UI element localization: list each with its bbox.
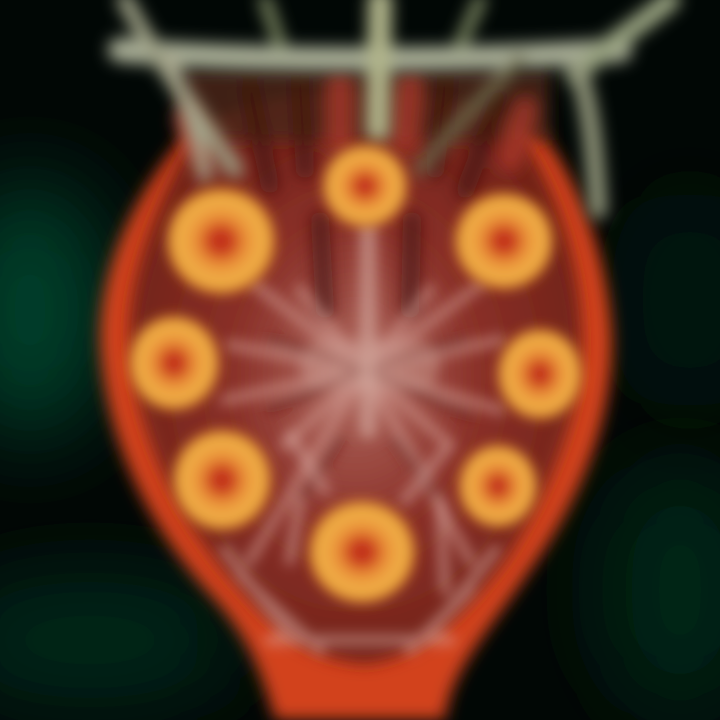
donut: top centre bbox=[323, 145, 407, 227]
donut: middle right bbox=[498, 329, 582, 419]
radial pale spokes bbox=[225, 230, 500, 650]
donut: bottom centre bbox=[309, 501, 415, 603]
top net strands bbox=[120, 0, 670, 210]
donut: lower left bbox=[173, 430, 271, 530]
donut: lower right bbox=[459, 445, 537, 527]
donut: upper left bbox=[167, 188, 275, 294]
panel: upper dark striations bbox=[180, 70, 550, 310]
donut: middle left bbox=[129, 316, 219, 410]
panel: inner chamber bbox=[130, 90, 582, 664]
donut: upper right bbox=[455, 193, 553, 289]
panel: orange body outline bbox=[100, 108, 612, 720]
